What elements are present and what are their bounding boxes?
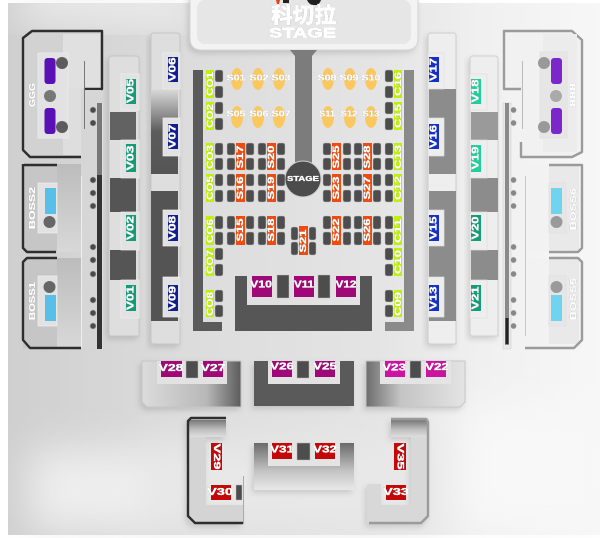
seat V05 <box>126 78 136 104</box>
seat V12: V12 <box>336 280 357 290</box>
panel: BOSS6 box <box>521 164 582 252</box>
seat CO8 <box>205 290 215 317</box>
panel: BOSS5 box: BOSS5 <box>569 277 578 320</box>
seat S16 <box>235 174 246 202</box>
oval labels: S08 <box>318 74 337 82</box>
oval labels: S07 <box>272 110 291 118</box>
seat V18: V18 <box>470 79 482 102</box>
seat S17: S17 <box>235 146 246 168</box>
seat V31: V31 <box>270 444 295 456</box>
panel: V27–V28 <box>142 361 241 407</box>
seat V13 <box>428 285 440 311</box>
seat S26: S26 <box>362 218 373 242</box>
seat C13 <box>393 143 403 170</box>
seat V30: V30 <box>207 487 234 498</box>
left divider with dots <box>81 61 103 349</box>
seat S28 <box>362 143 373 170</box>
seat S15: S15 <box>235 218 246 242</box>
seat S21: S21 <box>298 229 309 252</box>
seat V20: V20 <box>470 216 482 240</box>
seat S23: S23 <box>331 176 342 200</box>
stage logo icon fragments <box>276 0 321 5</box>
ovals <box>231 68 377 128</box>
seat S27 <box>362 174 373 202</box>
seat V03: V03 <box>126 145 136 170</box>
oval labels: S11 <box>319 110 336 118</box>
oval labels <box>226 74 381 118</box>
panel: right-hand VIP box <box>503 31 582 157</box>
seat V19 <box>470 145 482 172</box>
table seats <box>227 143 381 255</box>
seat C09: C09 <box>393 292 403 316</box>
seat C16 <box>393 70 403 98</box>
seat V06: V06 <box>168 57 178 82</box>
centre U-shaped back <box>235 276 372 331</box>
seat C09 <box>393 290 403 317</box>
seat S15 <box>235 216 246 245</box>
seat V25: V25 <box>313 362 338 372</box>
panel: BOSS1 box: BOSS1 <box>28 281 37 320</box>
seat C12 <box>393 174 403 202</box>
seat CO1: CO1 <box>205 72 215 96</box>
oval seats S01–S13 <box>226 68 381 128</box>
panel: BOSS2 box: BOSS2 <box>28 186 37 229</box>
seat V32: V32 <box>313 444 338 456</box>
seat CO8: CO8 <box>205 292 215 316</box>
seat S26 <box>362 216 373 245</box>
stage word: STAGE <box>269 24 336 40</box>
seat V17: V17 <box>428 57 440 81</box>
seat V01: V01 <box>126 285 136 310</box>
seat V29: V29 <box>211 444 222 470</box>
GGG text: GGG <box>28 83 37 107</box>
oval labels: S10 <box>362 74 381 82</box>
seat C10: C10 <box>393 250 403 274</box>
seat S27: S27 <box>362 176 373 200</box>
seat S16: S16 <box>235 176 246 200</box>
seat C11: C11 <box>393 219 403 243</box>
C-row seats right <box>385 70 393 317</box>
seat CO5 <box>205 174 215 202</box>
seat V11: V11 <box>294 280 314 290</box>
seat S25: S25 <box>331 145 342 168</box>
oval labels: S01 <box>226 74 246 82</box>
seat V16: V16 <box>428 124 440 148</box>
round stage <box>285 161 321 197</box>
oval labels: S05 <box>226 110 246 118</box>
seat C10 <box>393 248 403 276</box>
centre VIP row <box>250 275 357 298</box>
seat V19: V19 <box>470 146 482 170</box>
seat S22 <box>331 216 342 245</box>
seat CO7 <box>205 248 215 276</box>
left wall <box>193 70 222 331</box>
seat C15: C15 <box>393 104 403 128</box>
C-row seats left <box>215 70 223 317</box>
seat V01 <box>126 285 136 311</box>
seat V15: V15 <box>428 216 440 240</box>
seat V10: V10 <box>250 280 273 290</box>
seat V09 <box>168 285 178 311</box>
panel: V01–V05 column <box>109 56 139 336</box>
seat CO5: CO5 <box>205 176 215 200</box>
seat S22: S22 <box>331 218 342 242</box>
GGG seats <box>44 58 56 84</box>
GGG label plate <box>38 53 68 138</box>
seat V05: V05 <box>126 78 136 103</box>
seat V03 <box>126 144 136 172</box>
seat V21 <box>470 285 482 311</box>
seat V33: V33 <box>383 487 410 498</box>
seat S17 <box>235 143 246 170</box>
seat V35: V35 <box>394 444 406 471</box>
right divider with dots <box>503 61 526 349</box>
seat V22: V22 <box>425 362 450 373</box>
oval labels: S13 <box>362 110 380 118</box>
panel: V25–V26 <box>254 361 354 406</box>
seat CO2 <box>205 102 215 130</box>
seat S18 <box>266 216 277 245</box>
seat S18: S18 <box>266 218 277 242</box>
panel: V22–V23 <box>366 361 465 407</box>
seat S21 <box>298 226 309 255</box>
seat CO3: CO3 <box>205 145 215 169</box>
seat S25 <box>331 143 342 170</box>
seat S19 <box>266 174 277 202</box>
seat V08: V08 <box>168 215 178 240</box>
oval labels: S03 <box>272 74 291 82</box>
panel: BOSS1 box <box>23 258 85 348</box>
seat CO6 <box>205 216 215 245</box>
panel: BOSS6 box: BOSS6 <box>569 187 578 230</box>
seat C13: C13 <box>393 145 403 169</box>
panel: V29–V30 <box>187 418 244 524</box>
seat V07: V07 <box>168 124 178 148</box>
stage platform <box>190 0 418 50</box>
panel: V18–V21 column <box>470 56 498 336</box>
panel: V13–V17 column <box>428 33 456 344</box>
seat V26: V26 <box>270 362 295 372</box>
panel: V31–V32 <box>254 443 354 490</box>
panel: V33–V35 <box>367 418 429 524</box>
panel: GGG VIP box <box>23 31 102 157</box>
seat V20 <box>470 215 482 241</box>
seat V09: V09 <box>168 285 178 310</box>
oval labels: S06 <box>250 110 269 118</box>
oval labels: S09 <box>340 74 359 82</box>
right VIP seats <box>551 58 562 84</box>
seat S20: S20 <box>266 146 277 168</box>
seat C11 <box>393 216 403 245</box>
seat S19: S19 <box>266 176 277 200</box>
seat V28: V28 <box>158 363 184 374</box>
seats: C section left <box>205 70 223 317</box>
seat C16: C16 <box>393 72 403 96</box>
panel: V06–V09 column <box>151 33 180 344</box>
seat V13: V13 <box>428 286 440 310</box>
seat C12: C12 <box>393 176 403 200</box>
seat V02: V02 <box>126 215 136 240</box>
seat V15 <box>428 215 440 241</box>
oval labels: S12 <box>340 110 358 118</box>
seat C15 <box>393 102 403 130</box>
seat S23 <box>331 174 342 202</box>
seat V08 <box>168 215 178 241</box>
seat V21: V21 <box>470 286 482 310</box>
seat CO2: CO2 <box>205 104 215 128</box>
aisle to round stage <box>290 50 317 165</box>
round stage: STAGE <box>287 176 319 183</box>
oval labels: S02 <box>250 74 269 82</box>
seat V02 <box>126 215 136 241</box>
seat V23: V23 <box>382 362 407 374</box>
seats: C section right <box>385 70 403 317</box>
stage logo title: 科切拉 <box>271 4 336 28</box>
seat V27: V27 <box>200 363 226 374</box>
seat CO6: CO6 <box>205 219 215 243</box>
panel: BOSS5 box <box>521 258 582 348</box>
seat S28: S28 <box>362 146 373 168</box>
seat CO1 <box>205 70 215 98</box>
panel: BOSS2 box <box>23 164 85 252</box>
right VIP text: 888 <box>568 82 578 107</box>
right wall <box>385 70 414 331</box>
seat S20 <box>266 143 277 170</box>
seat CO7: CO7 <box>205 250 215 274</box>
seat CO3 <box>205 143 215 170</box>
